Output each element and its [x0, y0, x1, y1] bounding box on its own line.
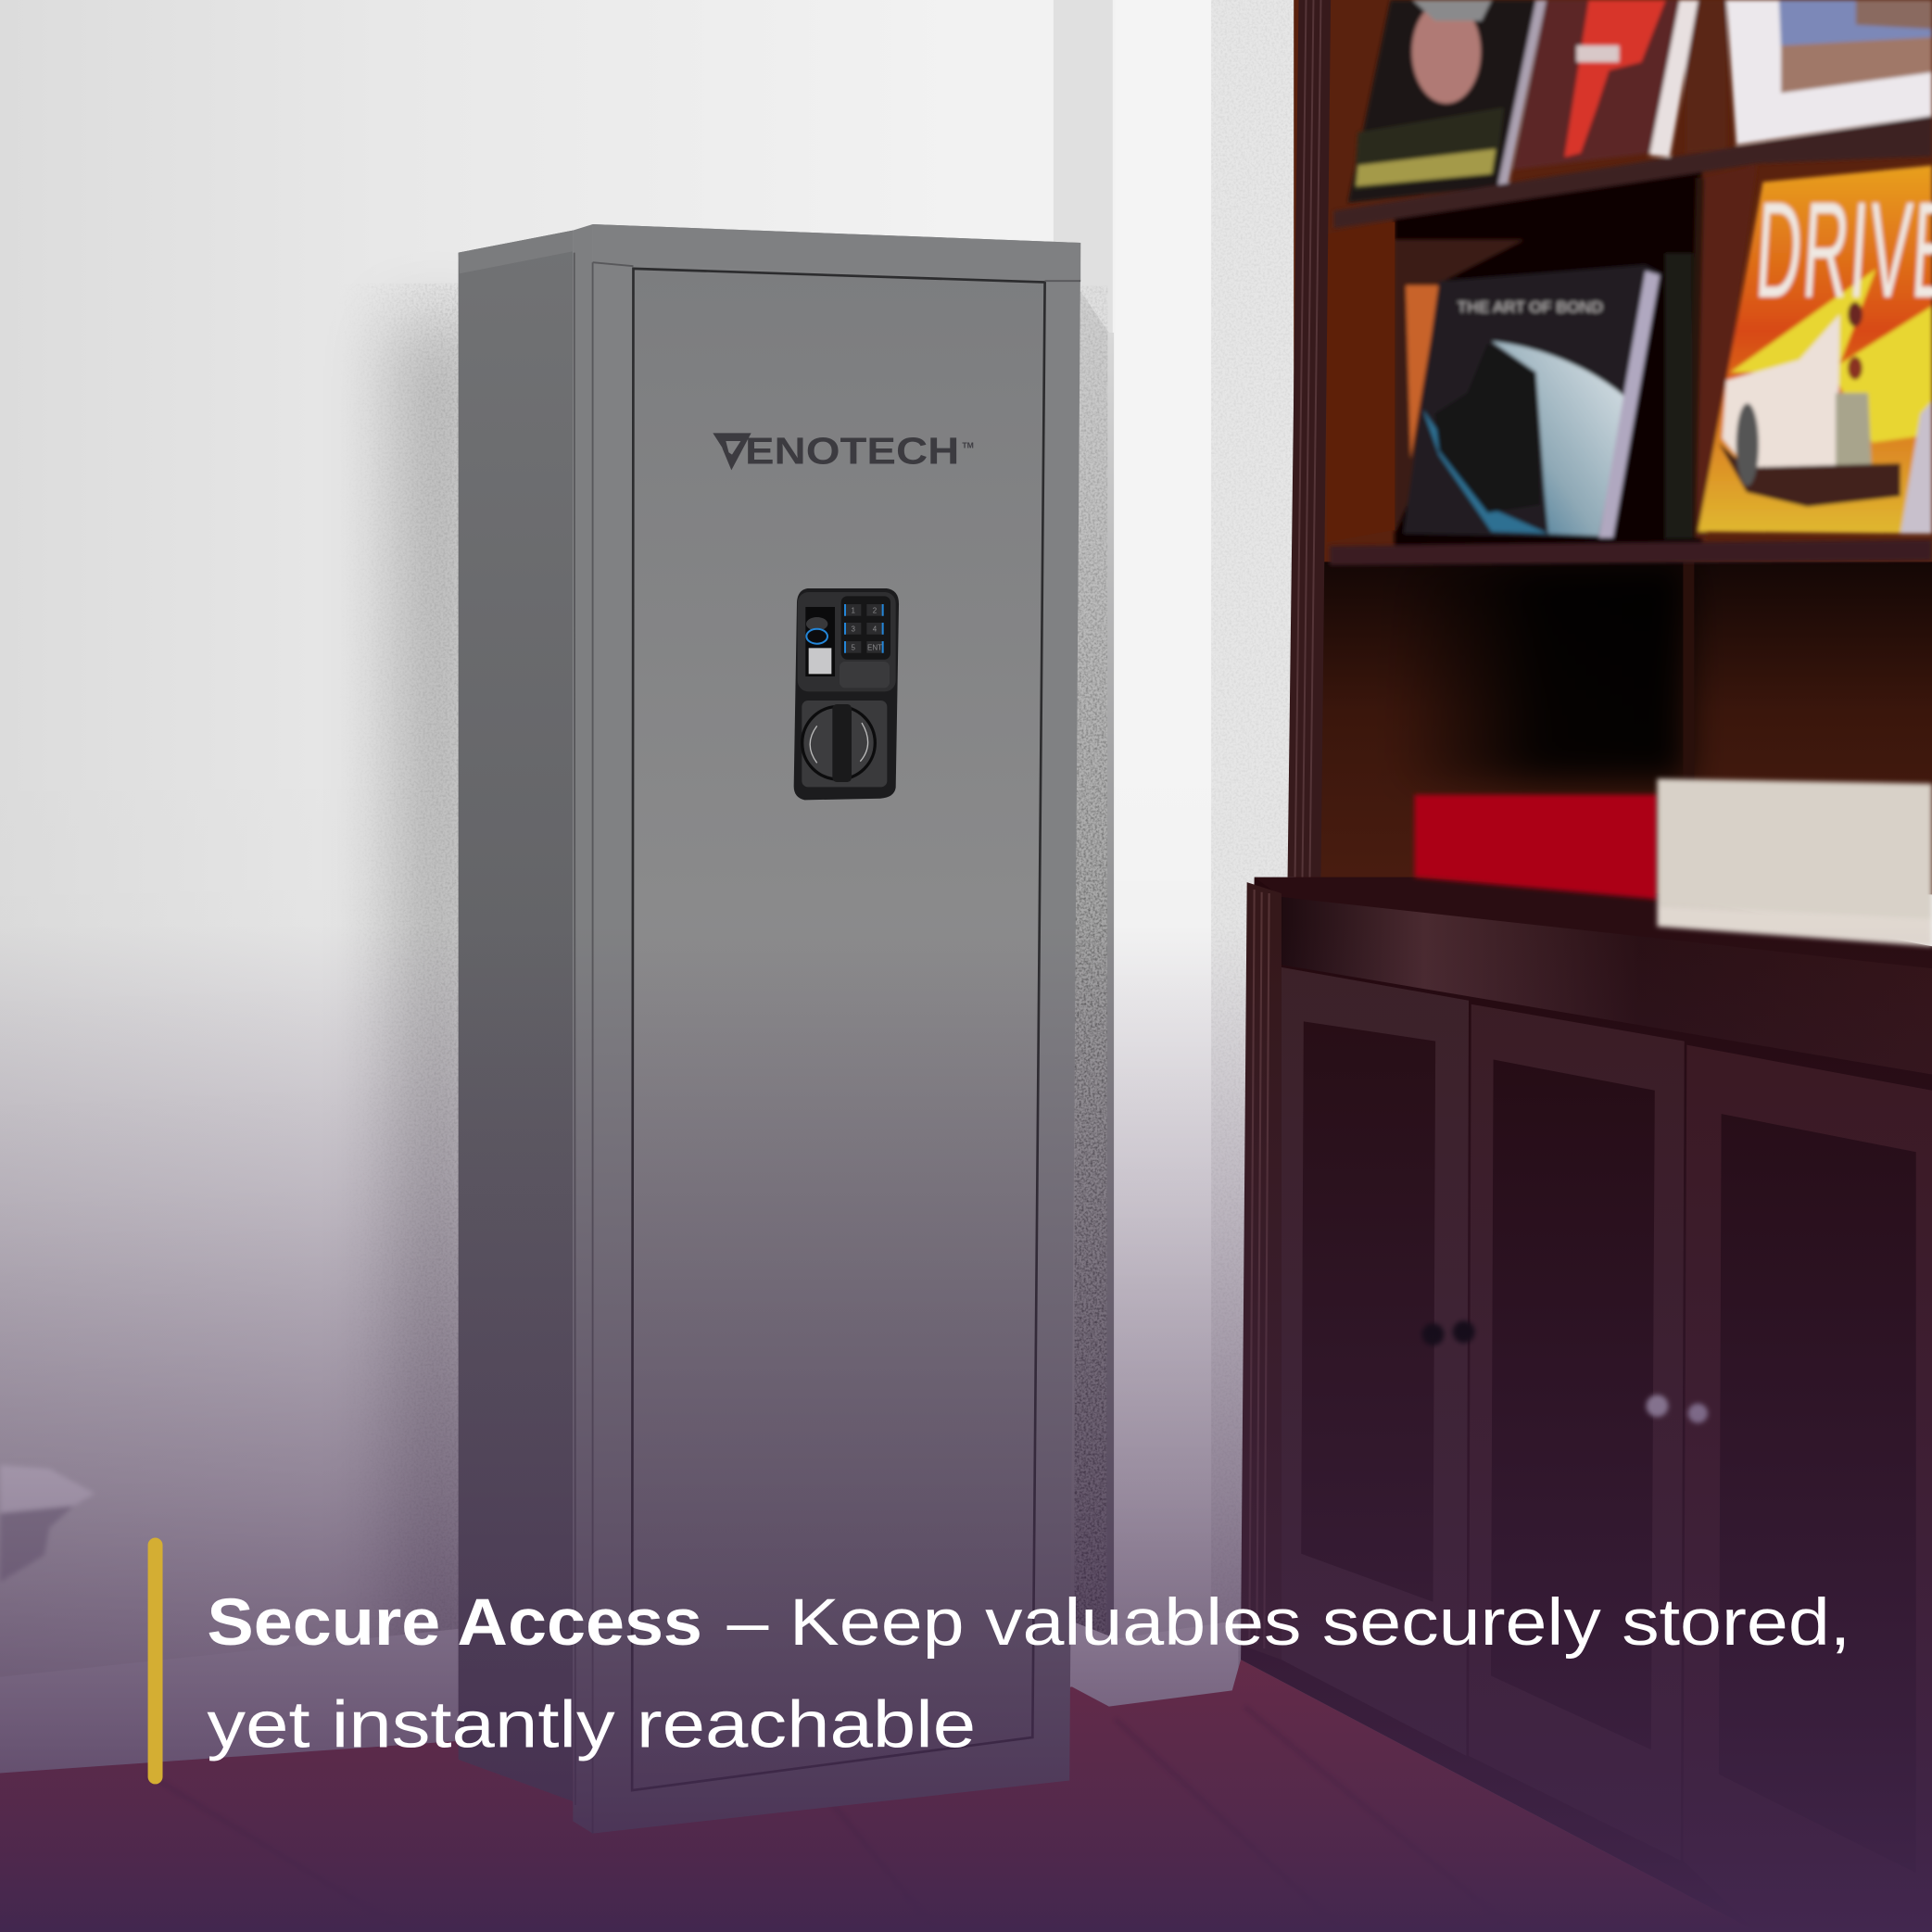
cabinet — [1241, 878, 1932, 1932]
door right — [1683, 1045, 1932, 1932]
door middle — [1469, 1004, 1685, 1861]
keypad: 1 — [851, 606, 855, 614]
door left — [1282, 967, 1469, 1756]
electronic lock — [794, 588, 899, 800]
caption — [207, 1585, 1850, 1762]
keypad: 4 — [873, 625, 878, 633]
rotary dial — [802, 704, 875, 782]
wall moulding — [0, 1465, 95, 1582]
book: orange — [1395, 240, 1524, 534]
caption bold lead: Secure Access — [207, 1585, 702, 1660]
framed picture — [1726, 0, 1932, 145]
logo wordmark: ENOTECH — [745, 430, 959, 473]
book: red cover — [1514, 0, 1698, 170]
book: the art of bond: THE ART OF BOND — [1458, 298, 1603, 316]
red box — [1415, 795, 1657, 900]
gun safe — [459, 224, 1080, 1834]
fingerprint reader — [805, 607, 835, 676]
purple gradient overlay — [0, 924, 1932, 1932]
top shelf board — [1333, 116, 1932, 228]
door — [632, 269, 1045, 1790]
left wood strip — [1327, 221, 1395, 542]
caption line one: – Keep valuables securely stored, — [727, 1585, 1850, 1660]
trademark: TM — [962, 440, 974, 449]
corner post — [573, 224, 593, 1834]
upper shelves and books — [1330, 0, 1932, 565]
side panel — [459, 231, 573, 1801]
bookcase — [1288, 0, 1932, 894]
caption line two: yet instantly reachable — [207, 1688, 976, 1762]
baseboard — [0, 1621, 1238, 1773]
book: cyclist — [1348, 0, 1547, 203]
keypad: 2 — [873, 606, 878, 614]
knobs — [1421, 1320, 1708, 1423]
lower shelf compartment — [1320, 562, 1932, 894]
rotary dial recess — [802, 701, 887, 787]
keypad: 5 — [851, 643, 855, 651]
logo mark — [713, 433, 751, 470]
book: the art of bond — [1404, 265, 1661, 537]
side top band — [459, 231, 573, 273]
middle shelf board — [1330, 540, 1932, 565]
lock badge — [840, 662, 890, 688]
top front band — [593, 224, 1080, 281]
book: drive — [1698, 166, 1932, 534]
keypad: 3 — [851, 625, 855, 633]
spine book — [1665, 253, 1692, 538]
cream box — [1657, 778, 1932, 946]
brand logo — [713, 430, 974, 473]
accent bar — [148, 1537, 163, 1784]
keypad — [841, 596, 890, 660]
front frame — [593, 224, 1080, 1834]
fluted pilaster — [1288, 0, 1331, 878]
floor — [0, 1660, 1757, 1932]
keypad: ENT — [867, 643, 882, 651]
